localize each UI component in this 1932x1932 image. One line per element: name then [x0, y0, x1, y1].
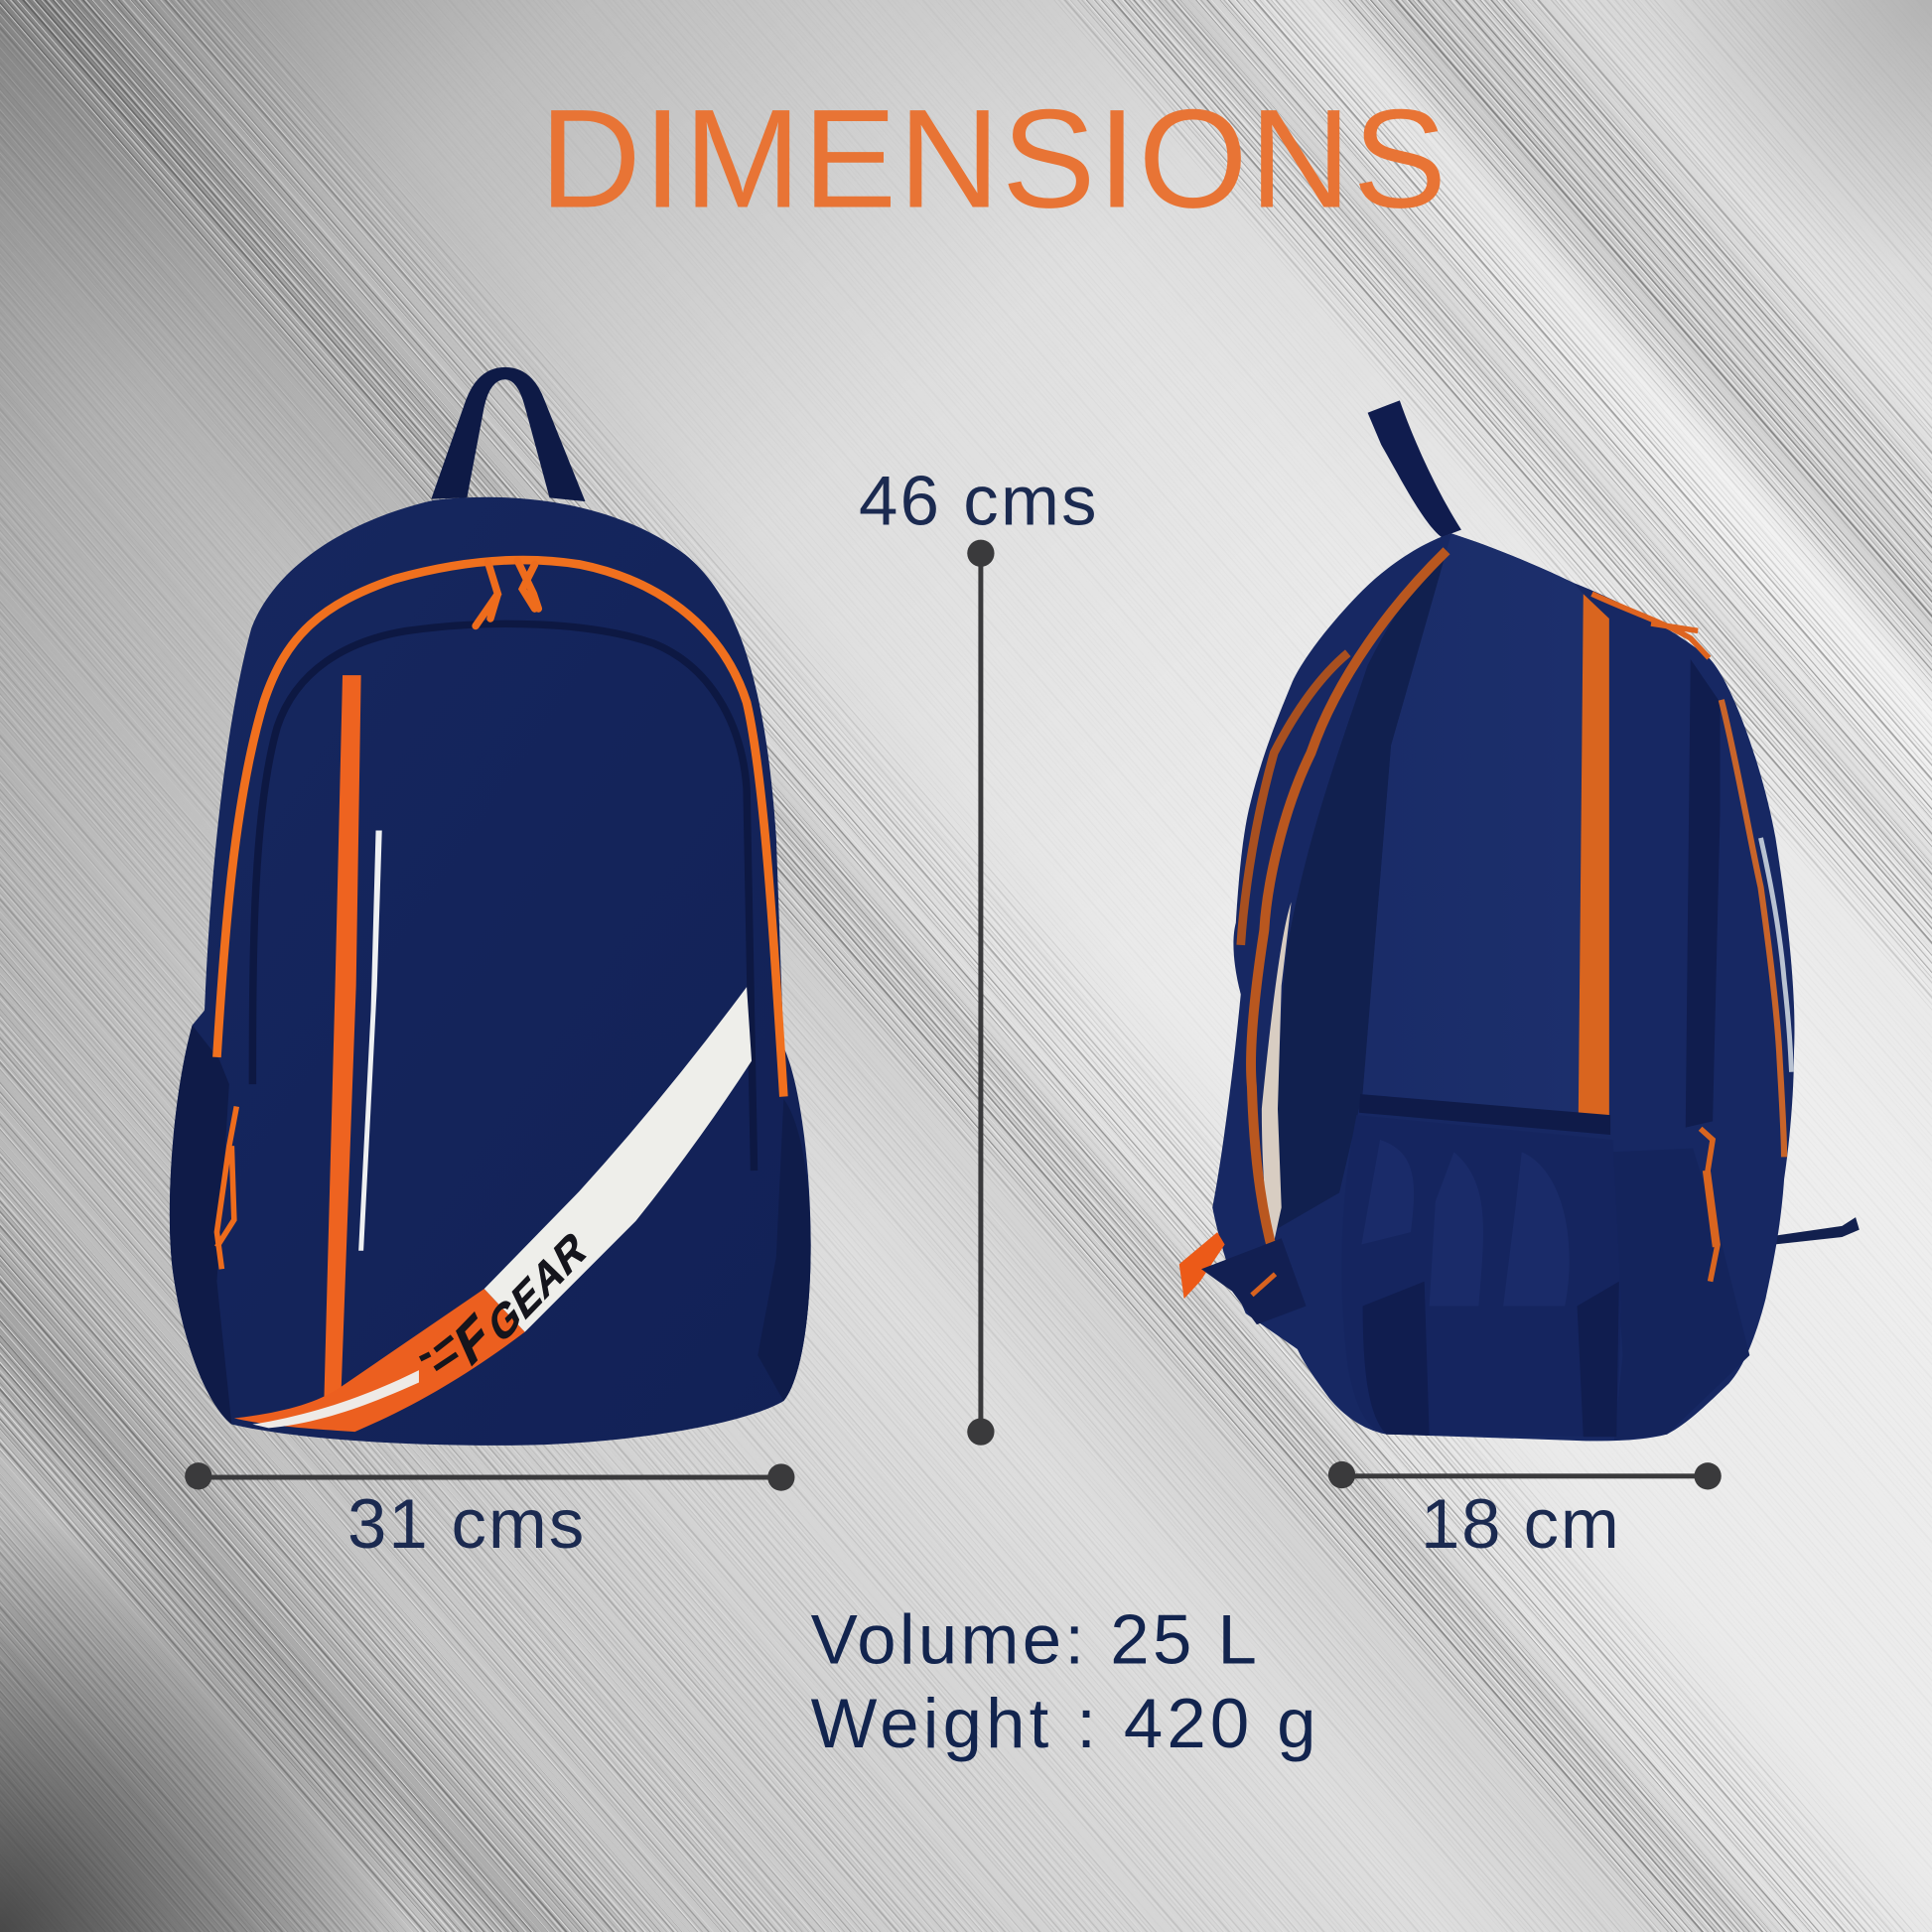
mesh pocket [1341, 1115, 1621, 1437]
height label: 46 cms [859, 462, 1097, 540]
front view backpack [170, 367, 811, 1446]
thin white stripe [1760, 838, 1792, 1072]
small white stripe [252, 1370, 419, 1428]
side body [1212, 533, 1794, 1441]
width label: 31 cms [347, 1484, 584, 1563]
orange zipper [216, 560, 783, 1097]
top zipper pull [1591, 594, 1709, 658]
front pocket seam [252, 623, 755, 1171]
side zipper pull [216, 1106, 236, 1269]
diagonal orange band [234, 1289, 525, 1432]
depth dimension line [1328, 1461, 1722, 1489]
seam panel [1686, 659, 1721, 1128]
top zipper pull right [517, 561, 538, 609]
mesh pocket folds [1361, 1140, 1570, 1307]
thin orange stripe [1722, 700, 1784, 1157]
gap between strap and back [1262, 901, 1292, 1247]
lower strap [1201, 1238, 1307, 1324]
front backpack handle [431, 367, 586, 501]
back mesh pad [1277, 554, 1447, 1228]
side panel [1363, 533, 1584, 1115]
wide orange side zipper [1579, 594, 1609, 1119]
side zipper pull [1701, 1129, 1718, 1282]
logo F: F [450, 1302, 496, 1379]
weight: Weight : 420 g [811, 1684, 1315, 1762]
volume: Volume: 25 L [811, 1599, 1257, 1678]
depth label: 18 cm [1421, 1484, 1619, 1563]
side view backpack [1179, 400, 1860, 1441]
logo dashes [420, 1337, 457, 1369]
diagonal white band [484, 987, 752, 1332]
mesh pocket shadow [1363, 1282, 1619, 1437]
height dimension line [967, 540, 995, 1446]
top zipper pull left [476, 562, 497, 625]
logo GEAR: GEAR [483, 1221, 591, 1355]
strap orange edging outer [1251, 551, 1447, 1257]
right strap [1774, 1217, 1860, 1244]
mesh pocket top band [1359, 1094, 1610, 1135]
side handle [1368, 400, 1461, 537]
lower front panel [1610, 1149, 1749, 1441]
front backpack body [170, 497, 811, 1446]
small orange tab [1252, 1274, 1276, 1295]
front backpack lower right pocket shade [758, 1099, 811, 1401]
F-Gear logo [420, 1221, 591, 1379]
strap orange edging inner [1241, 653, 1348, 945]
volume and weight [811, 1599, 1315, 1762]
front backpack side mesh pocket [170, 1026, 231, 1425]
left orange strap tip [1179, 1232, 1225, 1299]
thin white stripe [358, 830, 382, 1251]
title: DIMENSIONS [540, 79, 1447, 236]
width dimension line [185, 1462, 794, 1491]
vertical orange stripe [324, 675, 361, 1400]
